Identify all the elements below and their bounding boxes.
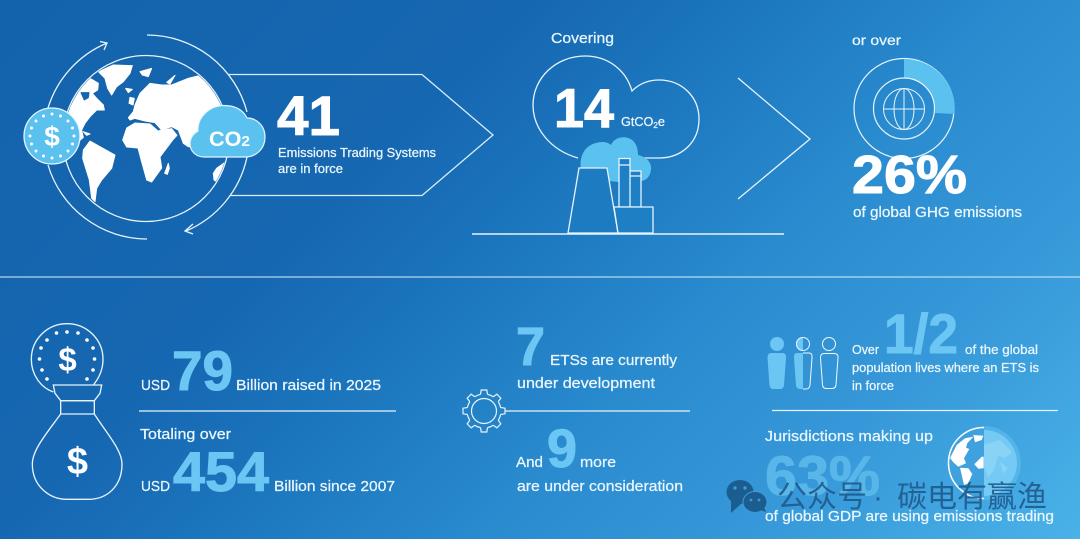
icon: chat bubbles [726, 480, 767, 513]
text: are under consideration: are under consideration [517, 479, 683, 495]
text: jurisdictions making up: Jurisdictions making up [765, 429, 933, 445]
panel: revenue raised [31, 324, 396, 503]
text: and: And [516, 455, 543, 471]
arrow banner outline [228, 74, 493, 196]
text: GtCO2e: 2 [653, 121, 658, 130]
text: billion since: Billion since 2007 [274, 479, 395, 495]
text: watermark left: 公众号 [777, 481, 867, 514]
panel: emissions trading systems [24, 35, 493, 239]
text: watermark right: 碳电有赢渔 [897, 481, 1047, 514]
text: emissions trading systems: Emissions Trading Systems [278, 146, 436, 160]
icon: CO2 cloud: CO2 [209, 128, 250, 151]
stat: 7: 7 [516, 317, 545, 377]
section divider [0, 276, 1080, 278]
text: in force: in force [852, 379, 894, 393]
icon: money bag and coin [31, 324, 122, 499]
divider [139, 410, 396, 412]
icon: CO2 cloud [190, 106, 265, 157]
icon: money bag and coin: $ [58, 341, 77, 378]
icon: half-filled globe [947, 426, 1021, 500]
panel: 26 percent of global GHG [852, 32, 1022, 221]
panel: population and GDP [765, 302, 1058, 525]
text: USD: USD [141, 378, 170, 394]
heading: covering: Covering [551, 31, 614, 47]
stat: 63 percent: 63% [765, 444, 880, 507]
text: of global GDP: of global GDP are using emissions trading [765, 509, 1054, 525]
text: over: Over [852, 343, 879, 357]
stat: 41: 41 [277, 84, 340, 147]
icon: dollar coin [24, 108, 80, 164]
stat: 79: 79 [172, 339, 233, 402]
icon: gear [463, 390, 505, 432]
stat: 14: 14 [554, 77, 614, 139]
icon: globe with cycle arrows [48, 35, 247, 239]
stat: 454: 454 [173, 440, 269, 503]
chart: donut with globe [854, 58, 955, 158]
text: of global GHG emissions: of global GHG emissions [853, 205, 1022, 221]
icon: three people [768, 337, 838, 389]
text: under development: under development [517, 376, 655, 392]
panel: covering 14 GtCO2e [472, 31, 784, 234]
text: more: more [580, 455, 616, 471]
stat: 26 percent: 26% [852, 145, 967, 205]
text: population lives: population lives where an ETS is [852, 361, 1039, 375]
text: of the global: of the global [965, 343, 1038, 357]
text: totaling over: Totaling over [140, 427, 231, 443]
divider [505, 410, 690, 412]
heading: or over: or over [852, 32, 901, 48]
icon: factory with smoke [472, 137, 784, 234]
text: GtCO2e: GtCO [621, 115, 653, 129]
stat: one half: 1/2 [884, 302, 958, 365]
text: ETSs are currently: ETSs are currently [550, 353, 678, 369]
text: billion raised: Billion raised in 2025 [236, 378, 381, 394]
icon: money bag and coin: $ [67, 441, 88, 483]
text: are in force: are in force [278, 162, 343, 176]
watermark [726, 480, 1047, 514]
icon: dollar coin: $ [44, 121, 60, 152]
panel: ETSs in development [463, 317, 690, 495]
chevron arrow [738, 78, 810, 199]
text: watermark dot: · [873, 481, 883, 514]
stat: 9: 9 [547, 419, 577, 479]
text: GtCO2e: e [658, 115, 665, 129]
text: USD: USD [141, 479, 170, 495]
icon: outline cloud [533, 56, 699, 158]
divider [772, 410, 1058, 412]
